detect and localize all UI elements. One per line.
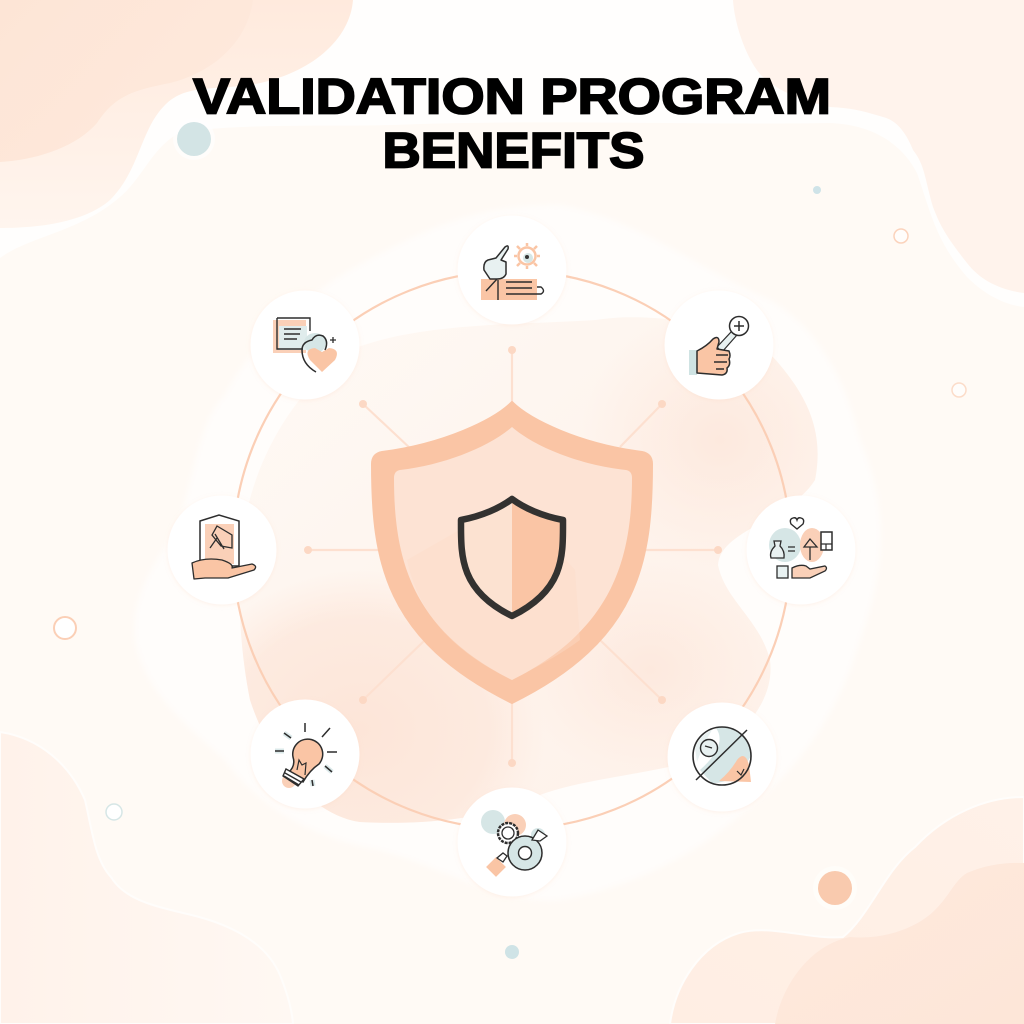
watercolor wash behind the ring — [240, 338, 818, 823]
corner blob: bottom right — [670, 797, 1024, 1024]
node: bottom, gears and tools — [458, 788, 566, 896]
node: right, value exchange — [746, 496, 856, 604]
corner blob: top left — [0, 0, 353, 228]
inner shield icon — [461, 499, 563, 616]
node: bottom right, crossed circle — [668, 702, 776, 812]
node: top, pointing hand and gear — [458, 216, 566, 324]
title — [193, 68, 831, 178]
node: bottom left, light bulb — [250, 700, 360, 808]
orbit ring — [233, 271, 791, 829]
corner blob: bottom left — [0, 732, 293, 1024]
spokes — [304, 346, 722, 767]
title: VALIDATION PROGRAM — [193, 68, 831, 124]
node: top right, hand holding plus — [664, 290, 774, 400]
corner blob: top right — [733, 0, 1024, 293]
title: BENEFITS — [382, 122, 644, 178]
node: left, hand holding shield diagram — [168, 496, 276, 604]
decorative dots — [54, 118, 966, 959]
central shield — [372, 402, 652, 703]
node: top left, document and heart — [250, 290, 360, 400]
